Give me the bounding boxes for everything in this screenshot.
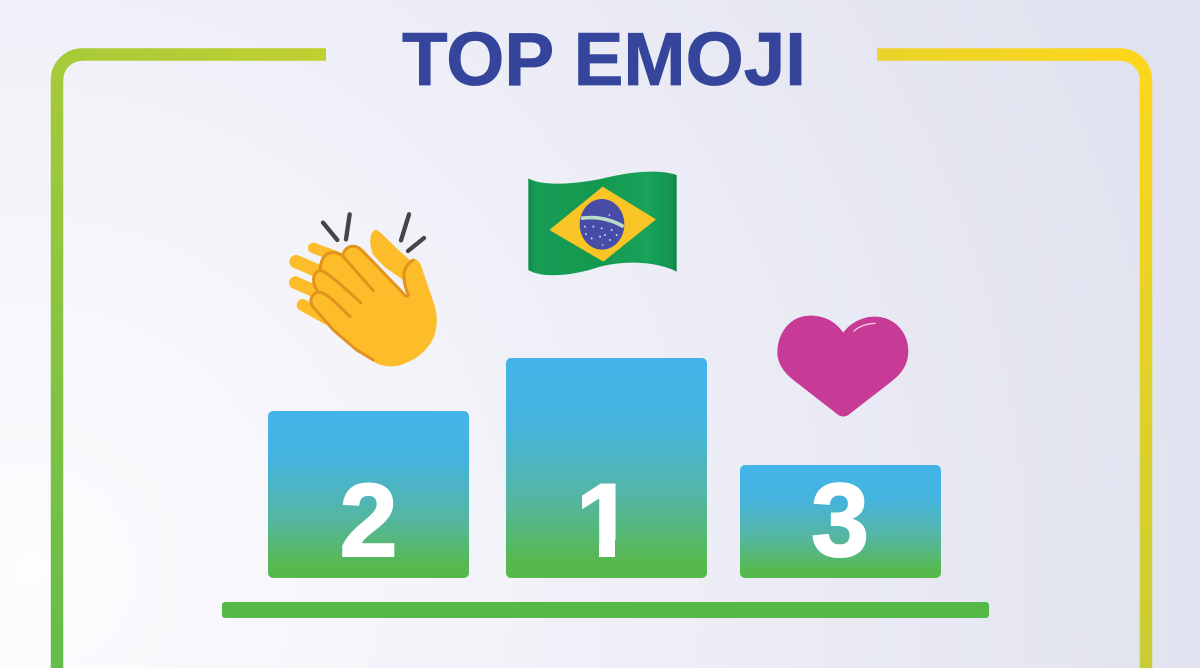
podium base bar — [222, 602, 989, 618]
icon: clapping hands emoji — [295, 214, 437, 367]
frame: right bracket — [877, 54, 1146, 668]
podium: third place — [740, 463, 941, 579]
frame: left bracket — [57, 54, 326, 668]
podium: first place — [506, 358, 707, 579]
podium: first place: 1 — [576, 463, 634, 579]
icon: pink heart emoji — [777, 316, 908, 417]
title: TOP EMOJI — [402, 17, 806, 101]
podium: third place: 3 — [811, 463, 869, 579]
podium: second place: 2 — [340, 463, 397, 579]
icon: Brazil flag emoji — [528, 172, 677, 275]
podium: second place — [268, 411, 469, 579]
